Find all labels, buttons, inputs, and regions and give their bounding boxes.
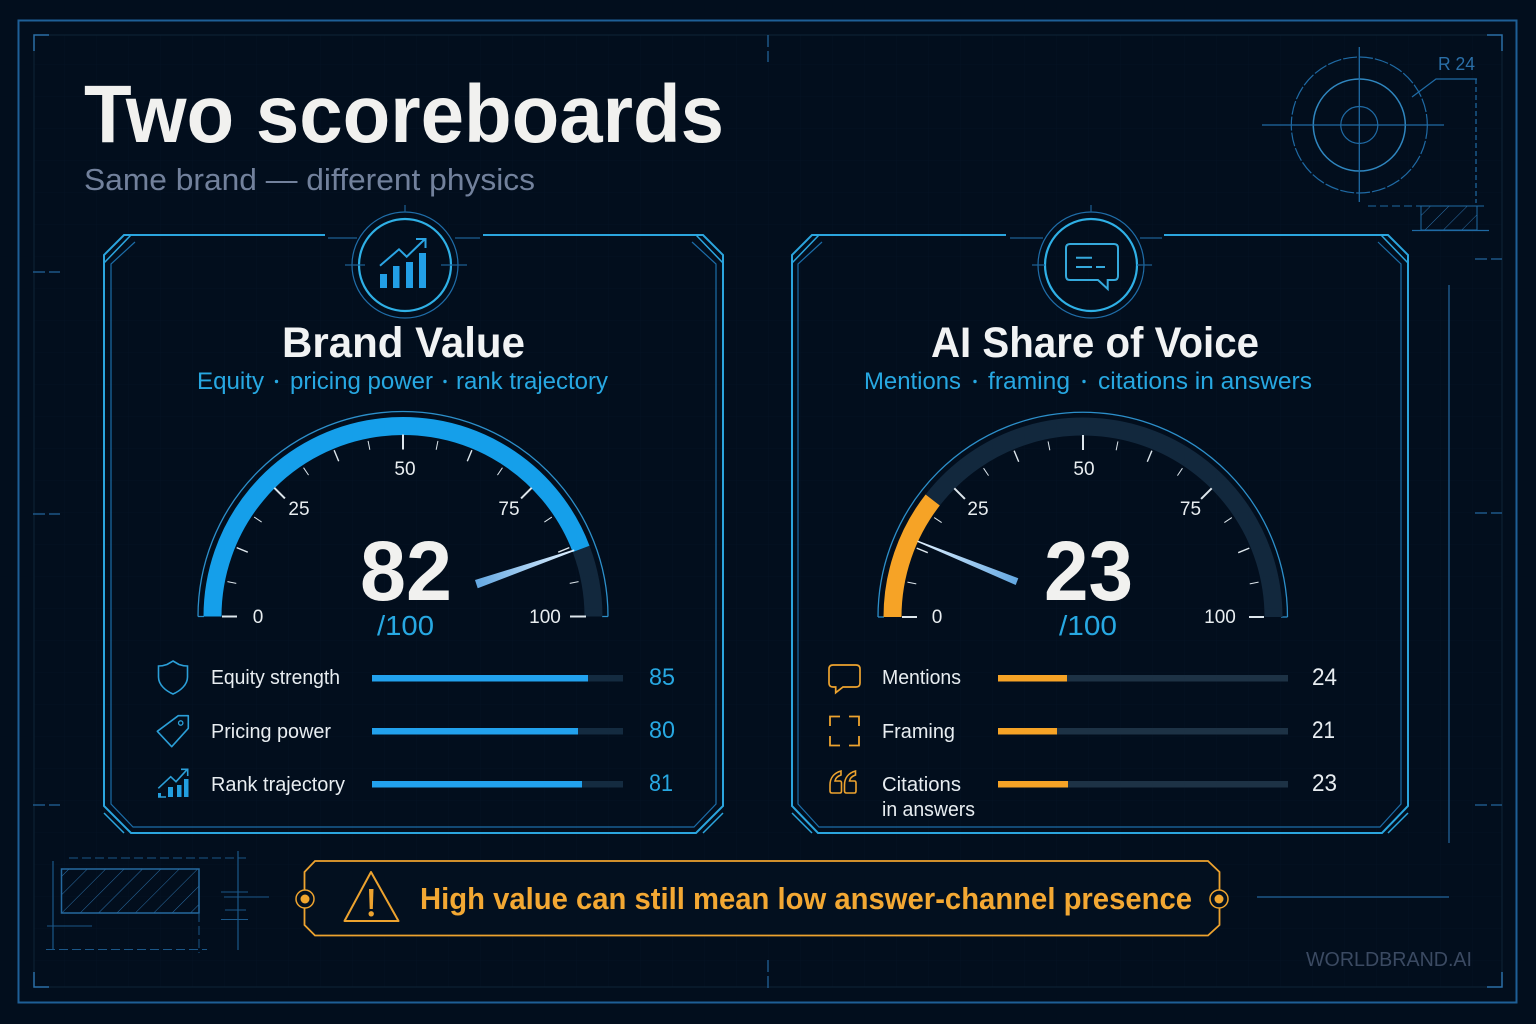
icon: warning triangle <box>344 872 398 921</box>
subheading: pricing power <box>290 368 433 395</box>
metric row: citations in answers: Citations <box>882 774 961 796</box>
gauge: 82 of 100: 50 <box>394 459 416 480</box>
metric row: citations in answers: in answers <box>882 799 975 821</box>
gauge needle <box>475 550 574 588</box>
panel frame <box>792 235 1408 833</box>
subheading <box>864 368 1312 395</box>
gauge: 82 of 100: 0 <box>253 607 263 628</box>
score: 82 <box>360 524 452 618</box>
score scale: /100 <box>1059 610 1117 641</box>
gauge: 82 of 100: 100 <box>529 607 561 628</box>
subheading: Mentions <box>864 368 961 395</box>
panel: AI Share of Voice <box>792 205 1408 833</box>
metric row: equity strength <box>158 661 675 694</box>
title: Two scoreboards <box>84 69 724 160</box>
gauge: 23 of 100: 50 <box>1073 459 1095 480</box>
metric row: pricing power <box>157 716 675 747</box>
gauge needle <box>918 540 1018 585</box>
gauge: 23 of 100: 75 <box>1180 499 1201 520</box>
metric row: mentions: Mentions <box>882 667 961 689</box>
heading: AI Share of Voice <box>931 319 1259 367</box>
metric row: framing <box>830 716 1335 746</box>
metric row: rank trajectory <box>158 769 673 797</box>
callout: warning banner <box>296 861 1228 936</box>
dimension label: R 24 <box>1438 54 1475 74</box>
metric row: citations in answers: 23 <box>1312 770 1337 797</box>
icon: chat bubble in ring <box>1010 205 1162 318</box>
metric row: equity strength: Equity strength <box>211 667 340 689</box>
gauge: 82 of 100: 75 <box>498 499 520 520</box>
panel: Brand Value <box>104 205 723 833</box>
heading: Brand Value <box>282 319 525 367</box>
gauge: 82 of 100 <box>198 412 608 641</box>
metric row: pricing power: Pricing power <box>211 721 331 743</box>
metric row: equity strength: 85 <box>649 664 675 691</box>
gauge: 82 of 100: 25 <box>288 499 310 520</box>
brand credit: WORLDBRAND.AI <box>1306 949 1472 971</box>
blueprint drawing: bottom-left hatched block <box>46 851 269 953</box>
blueprint drawing: top-right circle <box>1262 47 1489 230</box>
panel frame <box>104 235 723 833</box>
metric row: mentions: 24 <box>1312 664 1337 691</box>
subtitle: Same brand — different physics <box>84 162 535 197</box>
icon: growth chart in ring <box>328 205 480 318</box>
gauge: 23 of 100: 0 <box>932 607 942 628</box>
gauge: 23 of 100: 25 <box>967 499 989 520</box>
score: 23 <box>1044 524 1133 618</box>
metric row: rank trajectory: Rank trajectory <box>211 774 345 796</box>
metric row: pricing power: 80 <box>649 717 675 744</box>
score scale: /100 <box>377 610 434 641</box>
subheading: framing <box>988 368 1070 395</box>
subheading: citations in answers <box>1098 368 1312 395</box>
subheading: Equity <box>197 368 264 395</box>
gauge: 23 of 100: 100 <box>1204 607 1236 628</box>
metric row: mentions <box>829 664 1337 693</box>
metric row: rank trajectory: 81 <box>649 770 673 797</box>
metric row: framing: Framing <box>882 721 955 743</box>
metric row: citations in answers <box>830 770 1337 821</box>
subheading: rank trajectory <box>456 368 608 395</box>
subheading <box>197 368 608 395</box>
metric row: framing: 21 <box>1312 717 1335 744</box>
gauge: 23 of 100 <box>878 412 1288 641</box>
callout text: High value can still mean low answer-channel presence <box>420 881 1192 916</box>
